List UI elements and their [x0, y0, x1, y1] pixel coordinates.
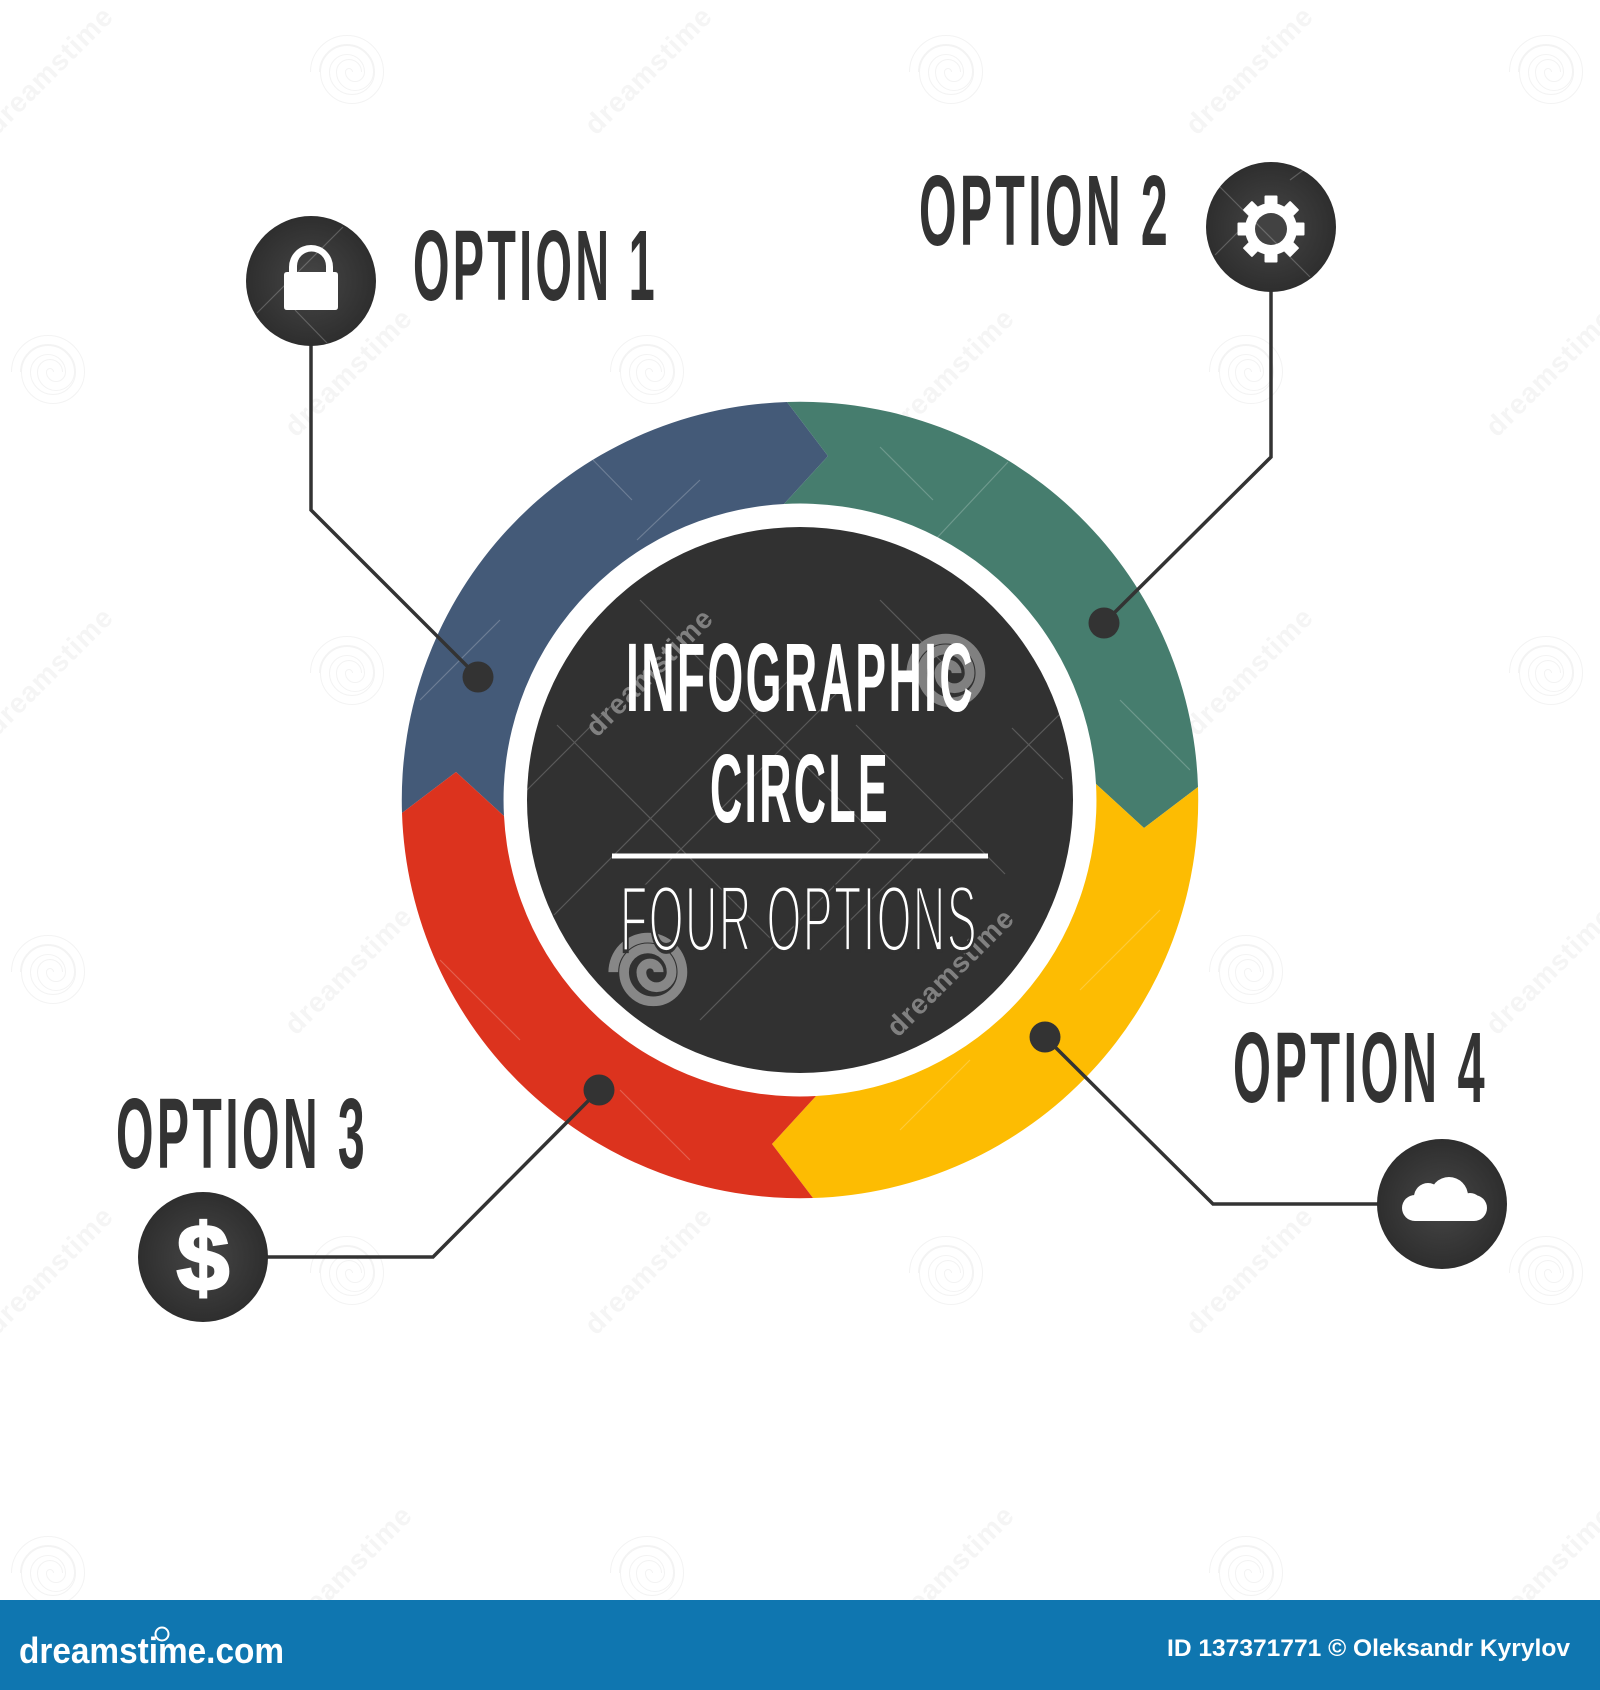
centre circle [504, 504, 1096, 1096]
text: CIRCLE [710, 734, 890, 843]
watermark pattern: dreamstime [578, 0, 718, 140]
connector: option 3 [262, 1074, 614, 1257]
watermark pattern: dreamstime [1179, 0, 1319, 140]
ring: four arrow segments [402, 402, 1198, 1198]
text: OPTION 1 [413, 210, 658, 322]
text: OPTION 3 [116, 1078, 368, 1190]
footer logo: dreamstime.com: dreamstime.com [19, 1630, 284, 1671]
icon: lock [246, 216, 376, 346]
footer credit: ID 137371771 © Oleksandr Kyrylov [1167, 1635, 1571, 1662]
connector: option 1 [311, 340, 494, 692]
centre circle: dreamstime [579, 602, 719, 742]
watermark pattern: dreamstime [880, 1499, 1020, 1639]
icon: gear [1206, 162, 1336, 292]
segment: blue arrow [402, 402, 828, 816]
segment: green arrow [784, 402, 1198, 828]
text: INFOGRAPHIC [626, 623, 975, 732]
connector: option 4 [1030, 1022, 1385, 1204]
watermark pattern: dreamstime [578, 1200, 718, 1340]
watermark pattern: dreamstime [880, 302, 1020, 442]
center divider line [612, 854, 988, 858]
segment: yellow arrow [772, 784, 1198, 1198]
connector: option 2 [1088, 285, 1271, 638]
watermark pattern: dreamstime [1179, 601, 1319, 741]
centre circle: dreamstime [880, 902, 1020, 1042]
watermark pattern: dreamstime [278, 900, 418, 1040]
text: FOUR OPTIONS [620, 866, 978, 971]
watermark pattern: dreamstime [278, 302, 418, 442]
watermark pattern: dreamstime [1179, 1200, 1319, 1340]
icon: dollar: $ [177, 1205, 229, 1310]
icon: cloud [1377, 1139, 1507, 1269]
icon: dollar [138, 1192, 268, 1322]
segment: red arrow [402, 772, 816, 1198]
text: OPTION 2 [919, 155, 1171, 267]
watermark pattern: dreamstime [278, 1499, 418, 1639]
footer bar [0, 1600, 1600, 1690]
